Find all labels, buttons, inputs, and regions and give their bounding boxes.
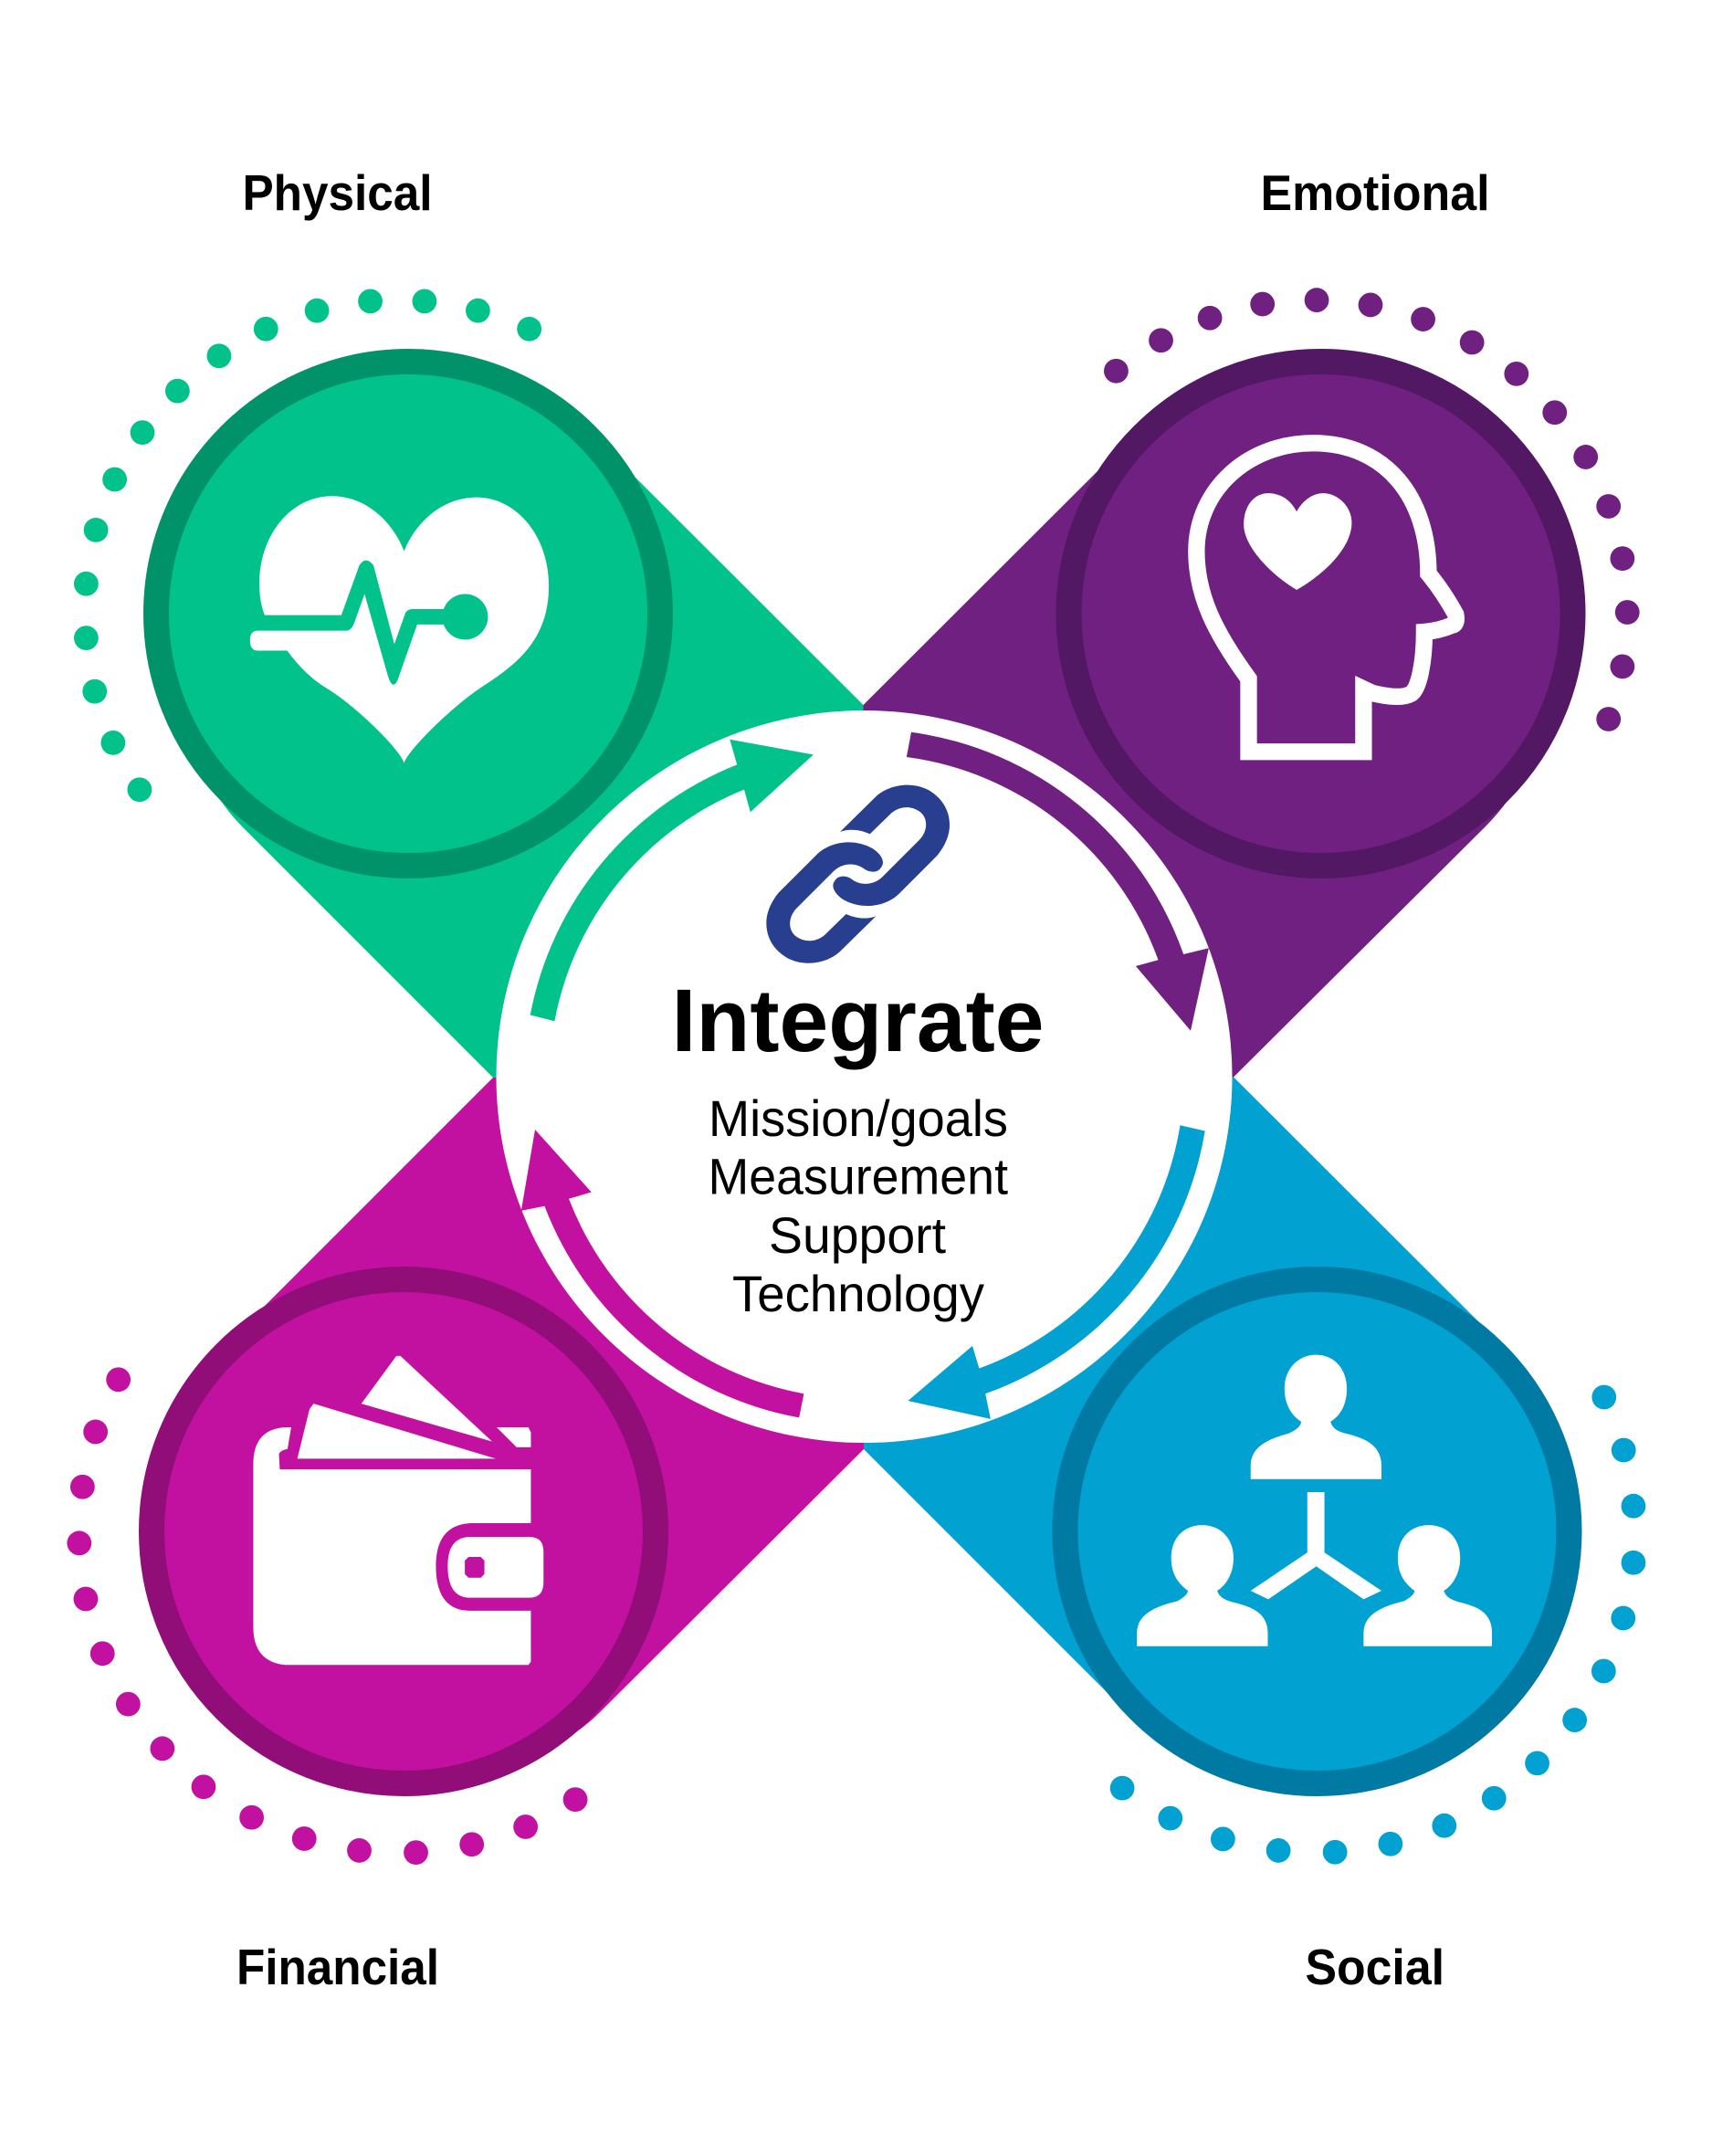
icon: three connected people [1137,1355,1492,1646]
text block: integrate list [709,1089,1008,1322]
arrow: blue, right to bottom [908,1125,1205,1419]
label: Financial: Financial [236,1939,439,1995]
financial dotted arc [67,1367,587,1865]
social circle [1065,1279,1569,1783]
text block: integrate list: Support [769,1206,946,1264]
text block: integrate list: Technology [732,1265,984,1322]
label: Physical: Physical [243,164,433,221]
heading: Integrate: Integrate [672,971,1045,1070]
emotional circle [1068,362,1572,866]
financial circle [152,1279,656,1783]
panel: financial [67,1078,864,1995]
arrow: green, bottom-left to top [530,740,814,1021]
text block: integrate list: Mission/goals [709,1089,1008,1147]
arrow: purple, top to right [907,732,1209,1031]
label: Social: Social [1306,1939,1444,1995]
icon: wallet with banknotes [253,1356,543,1665]
center white circle [497,710,1233,1443]
emotional petal [864,446,1514,1078]
arrow: magenta, bottom to left [521,1130,803,1417]
center panel: integrate [497,710,1233,1443]
text block: integrate list: Measurement [709,1148,1008,1205]
icon: heart with pulse [250,496,549,763]
physical dotted arc [74,289,541,802]
physical circle [156,362,660,866]
emotional dotted arc [1104,288,1640,731]
physical petal [215,445,864,1078]
financial petal [219,1078,864,1740]
social dotted arc [1110,1385,1645,1865]
icon: head with heart [1196,443,1456,752]
label: Emotional: Emotional [1260,164,1490,221]
icon: chain link [766,785,950,963]
panel: physical [74,164,864,1078]
social petal [864,1078,1507,1710]
panel: social [864,1078,1645,1995]
panel: emotional [864,164,1640,1078]
